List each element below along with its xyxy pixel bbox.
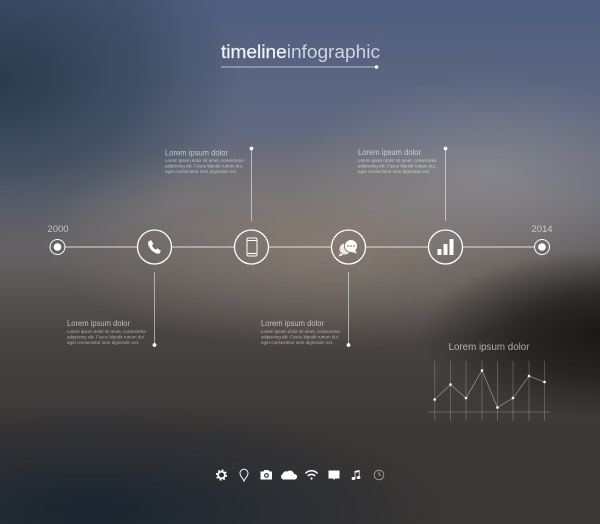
text block: lower center: eget consectetur sem dignissim vel. — [261, 340, 333, 346]
icon: phone handset — [148, 240, 161, 254]
text block: upper left: Lorem ipsum dolor — [165, 148, 228, 158]
text block: upper left: eget consectetur sem dignissim vel. — [165, 169, 237, 175]
connector: bars up — [444, 147, 447, 221]
text block: lower center: adipiscing elit. Fusce blandit rutrum dui, — [261, 334, 339, 340]
connector: mobile up — [250, 147, 253, 221]
text block: upper left — [165, 148, 244, 175]
chart title: Lorem ipsum dolor — [448, 341, 530, 353]
icon: gear — [217, 470, 226, 480]
text block: upper right: eget consectetur sem dignissim vel. — [358, 169, 430, 175]
icon: smartphone — [247, 238, 257, 256]
text block: upper right: adipiscing elit. Fusce blandit rutrum dui, — [358, 164, 436, 170]
data line — [435, 370, 544, 408]
node: bar chart — [428, 230, 462, 264]
node: chat — [332, 230, 366, 264]
start marker 2000 — [47, 224, 69, 254]
icon: camera — [260, 470, 272, 480]
icon row — [217, 469, 384, 481]
text block: upper left: adipiscing elit. Fusce blandit rutrum dui, — [165, 164, 243, 170]
text block: lower center: Lorem ipsum dolor sit amet, consectetur — [261, 329, 340, 335]
text block: upper right: Lorem ipsum dolor — [358, 147, 421, 157]
text block: lower center — [261, 318, 340, 346]
data points — [433, 369, 546, 409]
icon: speech bubbles — [338, 240, 358, 256]
start marker 2000: 2000 — [47, 224, 69, 235]
icon: cloud — [281, 471, 297, 480]
end marker 2014 — [531, 224, 553, 254]
icon: location pin — [240, 469, 248, 481]
text block: lower center: Lorem ipsum dolor — [261, 318, 324, 328]
icon: music note — [352, 470, 360, 480]
connector: phone down — [153, 272, 156, 347]
text block: upper left: Lorem ipsum dolor sit amet, consectetur — [165, 158, 244, 164]
line chart — [428, 341, 550, 421]
timeline axis — [65, 246, 534, 248]
text block: lower left: adipiscing elit. Fusce blandit rutrum dui, — [67, 334, 145, 340]
text block: lower left: eget consectetur sem dignissim vel. — [67, 340, 139, 346]
text block: upper right: Lorem ipsum dolor sit amet, consectetur — [358, 158, 437, 164]
node: mobile — [234, 230, 268, 264]
icon: monitor — [328, 470, 340, 480]
title: timelineinfographic — [221, 42, 380, 62]
text block: lower left: Lorem ipsum dolor sit amet, consectetur — [67, 329, 146, 335]
text block: lower left: Lorem ipsum dolor — [67, 318, 130, 328]
text block: upper right — [358, 147, 437, 175]
connector: chat down — [347, 272, 350, 347]
icon: clock — [374, 470, 384, 480]
text block: lower left — [67, 318, 146, 346]
end marker 2014: 2014 — [531, 224, 553, 235]
icon: bars — [438, 239, 454, 255]
node: phone — [138, 230, 172, 264]
icon: wifi — [306, 471, 318, 480]
